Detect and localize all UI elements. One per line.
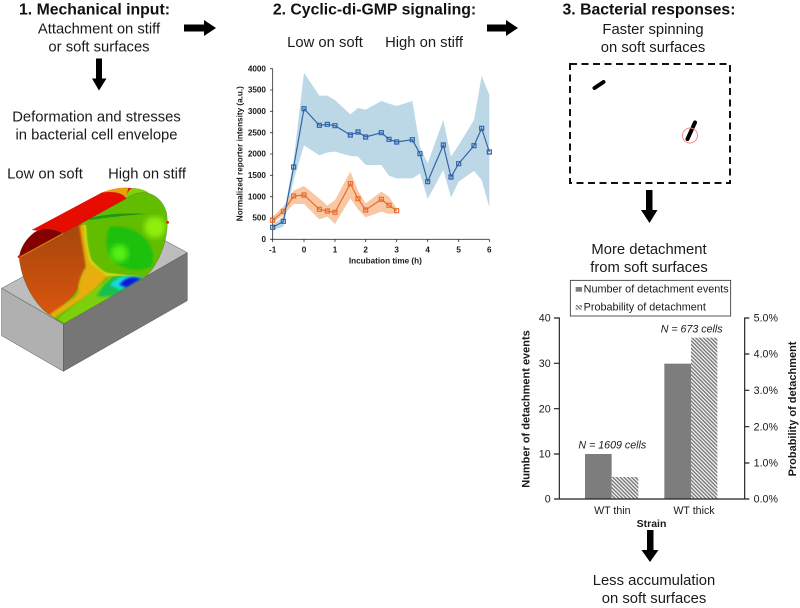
right tick labels: 3.0% (754, 385, 778, 397)
x tick labels: 5 (456, 246, 461, 255)
y tick labels: 0 (261, 235, 266, 244)
orange series (271, 182, 399, 222)
bars (585, 454, 612, 499)
right tick labels: 5.0% (754, 313, 778, 325)
arrow: down to deformation (92, 58, 106, 90)
cell two (688, 122, 695, 139)
y tick labels: 500 (252, 214, 266, 223)
y tick labels: 2000 (248, 150, 266, 159)
left tick labels: 30 (539, 358, 551, 370)
legend (570, 280, 731, 316)
label: low on soft: Low on soft (287, 35, 363, 51)
arrow: down to accumulation (642, 530, 658, 562)
left tick labels: 10 (539, 449, 551, 461)
y tick labels: 1500 (248, 171, 266, 180)
y tick labels: 4000 (248, 64, 266, 73)
y tick labels (248, 64, 266, 244)
arrow: down to detachment (641, 190, 658, 223)
x tick labels: 3 (394, 246, 399, 255)
text: attachment on surfaces: Attachment on stiff (38, 22, 160, 38)
x tick labels (269, 246, 492, 255)
red circle marker (682, 128, 698, 143)
right tick labels (754, 313, 778, 506)
left tick labels (539, 313, 551, 506)
text: more detachment: More detachment (591, 242, 707, 258)
heading: cyclic-di-GMP signaling: 2. Cyclic-di-GMP signaling: (273, 2, 476, 18)
text: more detachment: from soft surfaces (590, 260, 708, 276)
dashed frame (570, 64, 730, 183)
orange confidence band (273, 172, 397, 224)
cell one (594, 82, 604, 88)
x axis title: strain: Strain (637, 518, 666, 530)
right tick labels: 0.0% (754, 494, 778, 506)
bar chart: detachment: WT thick (673, 505, 715, 517)
legend: Number of detachment events (584, 284, 729, 296)
legend: Probability of detachment (584, 301, 706, 313)
x tick labels: 0 (302, 246, 307, 255)
heading: mechanical input: 1. Mechanical input: (19, 2, 170, 18)
text: faster spinning: on soft surfaces (601, 40, 705, 56)
x tick labels: 6 (487, 246, 492, 255)
axes (554, 318, 749, 499)
blue confidence band (273, 73, 489, 231)
x tick labels: 1 (333, 246, 338, 255)
stress contour face (19, 192, 168, 324)
line chart: normalized reporter intensity (235, 64, 492, 265)
bar chart: detachment: N = 673 cells (661, 323, 723, 335)
right tick labels: 2.0% (754, 421, 778, 433)
illustration: deformed bacterial cell on a block (2, 187, 187, 371)
panel: microscopy of spinning cells (570, 64, 730, 183)
axes (270, 69, 489, 242)
arrow: signaling to responses (487, 20, 518, 36)
text: deformation and stresses: in bacterial cell envelope (15, 128, 178, 144)
label: high on stiff: High on stiff (385, 35, 464, 51)
right axis title: Probability of detachment (787, 341, 799, 476)
x tick labels: -1 (269, 246, 277, 255)
back red band (32, 188, 148, 234)
bar chart: detachment (521, 280, 799, 517)
text: faster spinning: Faster spinning (602, 22, 704, 38)
y tick labels: 3500 (248, 86, 266, 95)
arrow: mechanical to signaling (184, 20, 216, 36)
left axis title: Number of detachment events (521, 330, 533, 488)
left tick labels: 40 (539, 313, 551, 325)
left tick labels: 0 (545, 494, 551, 506)
blue series (271, 107, 491, 229)
block (2, 220, 187, 371)
x tick labels: 4 (425, 246, 430, 255)
heading: bacterial responses: 3. Bacterial responses: (563, 2, 735, 18)
right tick labels: 1.0% (754, 458, 778, 470)
text: less accumulation: on soft surfaces (602, 591, 706, 607)
y tick labels: 1000 (248, 192, 266, 201)
x tick labels: 2 (363, 246, 368, 255)
label: low on soft: Low on soft (7, 166, 83, 182)
category labels: WT thin (594, 505, 631, 517)
N labels: N = 1609 cells (578, 440, 647, 452)
y tick labels: 2500 (248, 128, 266, 137)
right tick labels: 4.0% (754, 349, 778, 361)
label: high on stiff: High on stiff (108, 166, 187, 182)
x axis title: Incubation time (h) (349, 256, 422, 265)
y tick labels: 3000 (248, 107, 266, 116)
left tick labels: 20 (539, 403, 551, 415)
text: less accumulation: Less accumulation (593, 573, 715, 589)
text: deformation and stresses: Deformation and stresses (12, 110, 181, 126)
y axis title: Normalized reporter intensity (a.u.) (235, 86, 244, 221)
text: attachment on surfaces: or soft surfaces (48, 40, 150, 56)
